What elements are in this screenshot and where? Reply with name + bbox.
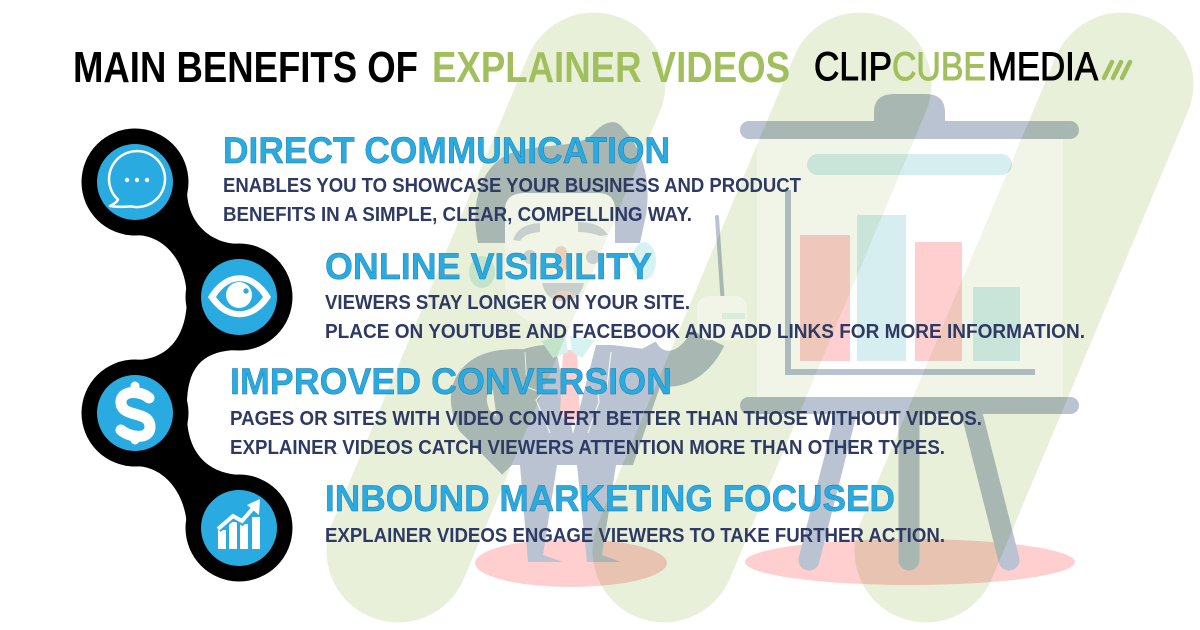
benefit: online visibility: VIEWERS STAY LONGER ON YOUR SITE. <box>325 292 690 314</box>
face and hand highlight <box>505 193 747 340</box>
benefit: online visibility <box>325 246 1085 343</box>
benefit: direct communication <box>223 130 801 226</box>
logo: Clip Cube Media: CUBE <box>892 45 986 89</box>
icon: growth chart <box>201 490 277 566</box>
benefit: direct communication: BENEFITS IN A SIMPLE, CLEAR, COMPELLING WAY. <box>223 204 692 226</box>
title part two: EXPLAINER VIDEOS <box>432 43 790 92</box>
benefit: improved conversion: PAGES OR SITES WITH VIDEO CONVERT BETTER THAN THOSE WITHOUT VIDEOS. <box>230 408 982 430</box>
floor shadows <box>475 539 1075 587</box>
icon: dollar sign <box>97 375 173 451</box>
benefit: improved conversion: IMPROVED CONVERSION <box>230 361 672 402</box>
title <box>73 43 790 92</box>
background green slanted stripes <box>398 84 1122 551</box>
benefit: direct communication: ENABLES YOU TO SHOWCASE YOUR BUSINESS AND PRODUCT <box>223 175 801 197</box>
presentation board backing <box>757 139 1063 397</box>
logo: Clip Cube Media: CLIP <box>814 45 892 89</box>
benefit: improved conversion <box>230 361 982 459</box>
easel <box>740 94 1079 560</box>
presenter <box>469 122 747 562</box>
benefit: online visibility: ONLINE VISIBILITY <box>325 246 652 287</box>
logo: Clip Cube Media <box>814 45 1130 89</box>
title part one: MAIN BENEFITS OF <box>73 43 418 92</box>
benefit: online visibility: PLACE ON YOUTUBE AND FACEBOOK AND ADD LINKS FOR MORE INFORMATION. <box>325 321 1085 343</box>
benefit: improved conversion: EXPLAINER VIDEOS CATCH VIEWERS ATTENTION MORE THAN OTHER TYPES. <box>230 437 945 459</box>
benefit: inbound marketing focused: INBOUND MARKETING FOCUSED <box>325 478 895 519</box>
logo: Clip Cube Media: MEDIA <box>988 45 1098 89</box>
black connected spinner shape <box>82 128 292 582</box>
faded illustration: presenter and easel <box>469 94 1079 587</box>
icon: speech bubble <box>97 144 173 220</box>
benefit: inbound marketing focused: EXPLAINER VIDEOS ENGAGE VIEWERS TO TAKE FURTHER ACTION. <box>325 525 945 547</box>
icon: eye <box>201 259 277 335</box>
benefit: direct communication: DIRECT COMMUNICATION <box>223 130 670 171</box>
benefit: inbound marketing focused <box>325 478 945 547</box>
